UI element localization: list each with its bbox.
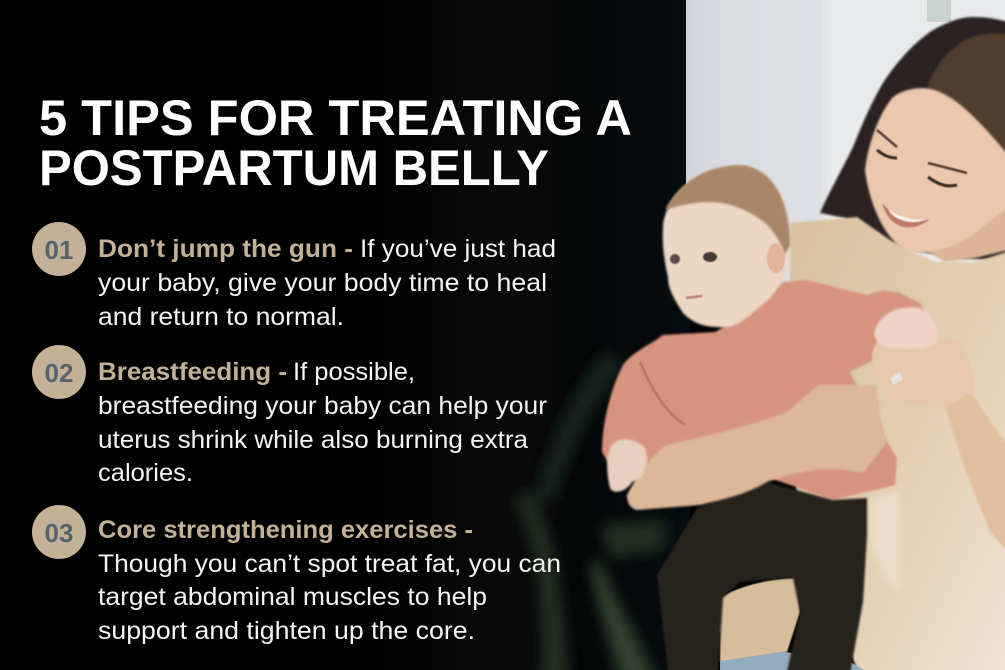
shirt fold <box>870 490 900 592</box>
number badge 03 <box>32 505 86 559</box>
number badge 01: 01 <box>45 235 73 265</box>
tip 02 text: uterus shrink while also burning extra <box>98 426 528 454</box>
tip 03 text: target abdominal muscles to help <box>98 583 487 611</box>
mother's hair <box>820 17 1005 262</box>
tip 03 text: Though you can’t spot treat fat, you can <box>98 550 561 578</box>
title: POSTPARTUM BELLY <box>39 140 549 196</box>
number badge 01 <box>32 222 86 276</box>
baby's raised fist <box>874 307 938 349</box>
number badge 02: 02 <box>45 358 73 388</box>
tip 01 <box>32 222 556 331</box>
baby's head <box>663 165 790 328</box>
mother's forearm and hand <box>627 385 887 510</box>
sweater crease <box>640 362 685 425</box>
jeans <box>720 652 864 670</box>
tip 01 text: and return to normal. <box>98 303 344 331</box>
tucked shirt hem <box>720 578 800 662</box>
baby's hair <box>665 165 790 255</box>
baby's trousers <box>657 482 867 670</box>
tip 02 text <box>98 358 547 487</box>
blurred plant <box>515 350 665 670</box>
baby's ear and eyes <box>670 243 785 298</box>
tip 02 <box>32 345 547 487</box>
tip 01 text: If you’ve just had <box>360 235 556 263</box>
mother's shirt and torso <box>790 217 1005 670</box>
tip 03 text: support and tighten up the core. <box>98 617 475 645</box>
tip 03 text <box>98 516 561 645</box>
tip 03 <box>32 505 561 645</box>
photo: mother and baby <box>515 0 1005 670</box>
number badge 02 <box>32 345 86 399</box>
tip 01 text <box>98 235 556 331</box>
mother's face <box>865 88 1005 253</box>
tip 01 text: Don’t jump the gun - <box>98 235 353 263</box>
title <box>39 90 632 196</box>
mother's arm <box>943 392 1005 570</box>
tip 02 text: breastfeeding your baby can help your <box>98 392 547 420</box>
number badge 03: 03 <box>45 518 73 548</box>
tip 02 text: If possible, <box>293 358 415 386</box>
baby's sweater <box>602 280 938 500</box>
tip 01 text: your baby, give your body time to heal <box>98 269 547 297</box>
title: 5 TIPS FOR TREATING A <box>39 90 632 146</box>
tip 02 text: calories. <box>98 459 193 487</box>
facial features <box>877 130 967 227</box>
baby's hand <box>607 439 647 492</box>
tip 03 text: Core strengthening exercises - <box>98 516 473 544</box>
window and curtain <box>686 0 1005 632</box>
mother's neck <box>905 195 1005 262</box>
wedding ring <box>890 372 903 385</box>
tip 02 text: Breastfeeding - <box>98 358 287 386</box>
mother's raised hand <box>872 332 974 408</box>
